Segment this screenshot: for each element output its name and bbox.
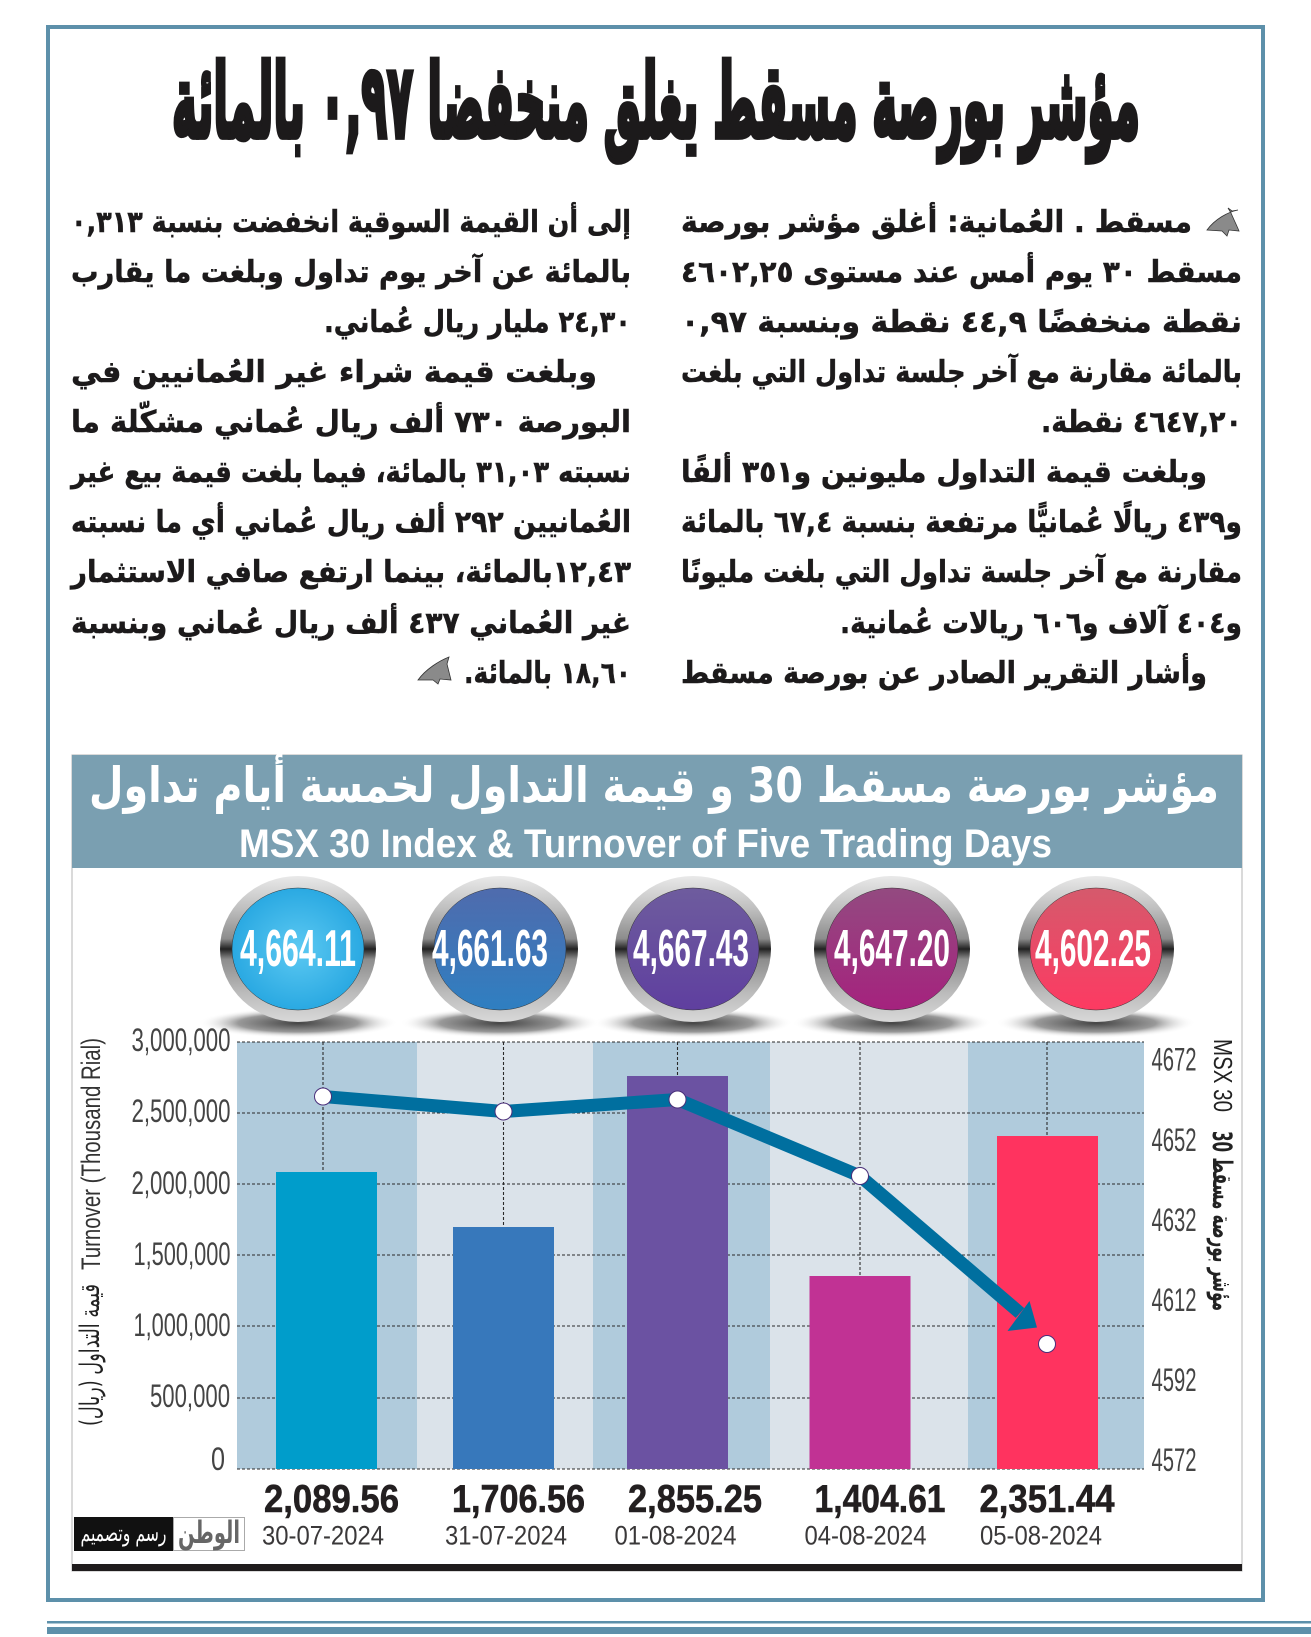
right axis ticks: 4572 [1152,1442,1196,1478]
left axis ticks: 0 [211,1441,225,1477]
badge 04-08: 4,647.20 [834,920,950,978]
left axis title: Turnover (Thousand Rial) [76,1038,106,1270]
icon: sail ornament end [418,657,451,684]
left axis ticks: 1,500,000 [134,1236,230,1272]
turnover values: 1,706.56 [452,1478,585,1521]
article column: right: نقطة منخفضًا ٤٤,٩ نقطة وبنسبة ٠,٩٧ [681,305,1242,340]
left axis ticks: 3,000,000 [132,1022,230,1058]
article column: left [69,202,631,691]
right axis title: MSX 30 [1208,1039,1238,1112]
badge 01-08: 4,667.43 [633,920,749,978]
chart base rule [72,1564,1242,1571]
badge 30-07 [198,876,398,1038]
article column: left: إلى أن القيمة السوقية انخفضت بنسبة ٠,٣١٣ [71,202,631,240]
article column: right: ٤٦٤٧,٢٠ نقطة. [1041,405,1242,440]
left axis ticks [132,1022,230,1477]
left axis title: قيمة التداول (ريال) [75,1284,106,1426]
badge 05-08 [996,876,1196,1038]
right axis title [1206,1039,1238,1311]
trading dates: 31-07-2024 [445,1520,567,1550]
turnover values: 2,855.25 [628,1478,762,1521]
trading dates: 05-08-2024 [980,1520,1102,1550]
turnover values: 1,404.61 [814,1478,946,1521]
trading dates: 04-08-2024 [804,1520,926,1550]
badge 04-08 [792,876,992,1038]
right axis title: مؤشر بورصة مسقط 30 [1206,1131,1237,1311]
turnover values: 2,351.44 [980,1478,1115,1521]
footer double rule [47,1621,1311,1634]
article column: right: وبلغت قيمة التداول مليونين و٣٥١ ألفًا [681,452,1207,490]
logo: Al Watan credit: رسم وتصميم [80,1521,166,1547]
badge 30-07: 4,664.11 [240,920,356,978]
article column: right: و٤٠٤ آلاف و٦٠٦ ريالات عُمانية. [840,604,1242,641]
index badges [198,876,1196,1038]
left axis ticks: 2,500,000 [132,1093,230,1129]
article column: right: مسقط ٣٠ يوم أمس عند مستوى ٤٦٠٢,٢٥ [681,252,1242,290]
right axis ticks: 4632 [1152,1202,1196,1238]
right axis ticks: 4652 [1152,1122,1196,1158]
chart header band [72,754,1242,868]
right axis ticks: 4672 [1152,1042,1196,1078]
right axis ticks: 4592 [1152,1362,1196,1398]
article column: left: ١٢,٤٣بالمائة، بينما ارتفع صافي الاستثمار [69,555,631,590]
right axis ticks [1152,1042,1196,1478]
turnover values: 2,089.56 [264,1478,399,1521]
badge 31-07 [400,876,600,1038]
article column: left: ١٨,٦٠ بالمائة. [464,656,631,691]
article column: left: وبلغت قيمة شراء غير العُمانيين في [71,355,597,390]
trading dates [262,1520,1102,1550]
article column: right [681,202,1242,691]
trading dates: 01-08-2024 [614,1520,736,1550]
left axis title [75,1038,106,1426]
badge 01-08 [593,876,793,1038]
article column: right: مقارنة مع آخر جلسة تداول التي بلغت مليونًا [681,553,1242,590]
panel: chart [72,754,1242,1571]
left axis ticks: 1,000,000 [134,1307,230,1343]
bar chart: turnover [276,1076,1098,1469]
left axis ticks: 500,000 [150,1378,230,1414]
article column: left: بالمائة عن آخر يوم تداول وبلغت ما يقارب [71,253,631,290]
chart heading english: MSX 30 Index & Turnover of Five Trading Days [239,822,1052,866]
article column: right: وأشار التقرير الصادر عن بورصة مسقط [681,653,1207,691]
article column: right: مسقط . العُمانية: أغلق مؤشر بورصة [681,202,1192,240]
article column: left: ٢٤,٣٠ مليار ريال عُماني. [324,305,631,340]
article column: left: البورصة ٧٣٠ ألف ريال عُماني مشكّلة ما [71,401,631,440]
turnover values [264,1478,1115,1521]
badge 05-08: 4,602.25 [1035,920,1151,978]
article column: left: نسبته ٣١,٠٣ بالمائة، فيما بلغت قيمة بيع غير [69,455,631,490]
left axis ticks: 2,000,000 [132,1165,230,1201]
trading dates: 30-07-2024 [262,1520,384,1550]
badge 31-07: 4,661.63 [432,920,548,978]
right axis ticks: 4612 [1152,1282,1196,1318]
article column: right: و٤٣٩ ريالًا عُمانيًّا مرتفعة بنسبة ٦٧,٤ بالمائة [681,500,1242,540]
line chart: MSX 30 index with arrow [314,1088,1056,1352]
article column: left: العُمانيين ٢٩٢ ألف ريال عُماني أي ما نسبته [71,502,631,540]
logo: Al Watan credit: الوطن [178,1515,240,1551]
logo: Al Watan credit [74,1515,244,1551]
article column: left: غير العُماني ٤٣٧ ألف ريال عُماني وبنسبة [71,603,631,641]
icon: sail ornament [1207,208,1239,236]
chart heading arabic: مؤشر بورصة مسقط 30 و قيمة التداول لخمسة أيام تداول [89,754,1219,815]
plot background bands [237,1042,1144,1469]
